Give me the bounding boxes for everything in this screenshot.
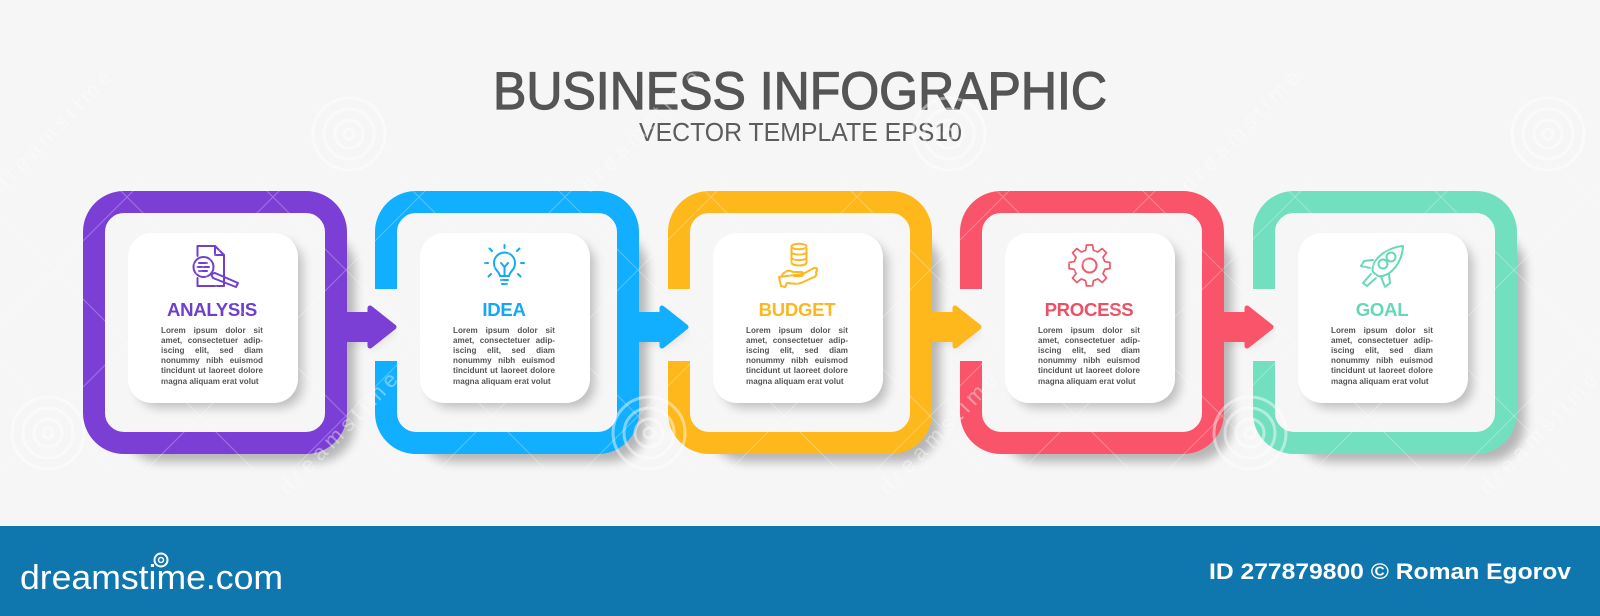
body text: process	[1038, 326, 1140, 386]
ring: goal	[1253, 191, 1530, 468]
watermark overlay: dreamstime	[576, 65, 705, 197]
body text: analysis: nonummy nibh euismod	[161, 356, 263, 365]
watermark overlay: dreamstime	[274, 367, 403, 499]
body text: budget	[746, 326, 848, 386]
panel: budget	[668, 191, 982, 468]
panel: goal	[1253, 191, 1530, 468]
body text: idea	[453, 326, 555, 386]
body text: goal: nonummy nibh euismod	[1331, 356, 1433, 365]
ring and arrow: idea	[375, 191, 688, 468]
body text: process: nonummy nibh euismod	[1038, 356, 1140, 365]
card: budget	[713, 233, 883, 403]
body text: idea: nonummy nibh euismod	[453, 356, 555, 365]
body text: goal	[1331, 326, 1433, 386]
body text: analysis: iscing elit, sed diam	[161, 346, 263, 355]
panel: analysis	[83, 191, 396, 468]
card: process	[1005, 233, 1175, 403]
body text: idea: tincidunt ut laoreet dolore	[453, 366, 555, 375]
title block	[493, 62, 1107, 147]
icon: coins and hand	[778, 242, 818, 288]
subheading: VECTOR TEMPLATE EPS10	[639, 117, 962, 147]
watermark overlay: dreamstime	[1176, 65, 1305, 197]
body text: goal: Lorem ipsum dolor sit	[1331, 326, 1433, 334]
icon: gear	[1068, 244, 1111, 287]
label: goal: GOAL	[1356, 298, 1408, 320]
body text: idea: iscing elit, sed diam	[453, 346, 555, 355]
body text: budget: magna aliquam erat volut	[746, 377, 844, 386]
body text: process: tincidunt ut laoreet dolore	[1038, 366, 1140, 375]
body text: budget: iscing elit, sed diam	[746, 346, 848, 355]
body text: analysis	[161, 326, 263, 386]
body text: process: iscing elit, sed diam	[1038, 346, 1140, 355]
card: goal	[1298, 233, 1468, 403]
body text: budget: tincidunt ut laoreet dolore	[746, 366, 848, 375]
body text: analysis: magna aliquam erat volut	[161, 377, 259, 386]
label: analysis: ANALYSIS	[167, 298, 257, 320]
body text: process: Lorem ipsum dolor sit	[1038, 326, 1140, 334]
watermark overlay: dreamstime	[874, 367, 1003, 499]
panel: process	[960, 191, 1274, 468]
body text: idea: magna aliquam erat volut	[453, 377, 551, 386]
icon: document with magnifier	[192, 245, 239, 288]
panel: idea	[375, 191, 688, 468]
label: budget: BUDGET	[759, 298, 835, 320]
body text: budget: Lorem ipsum dolor sit	[746, 326, 848, 334]
card: analysis	[128, 233, 298, 403]
label: process: PROCESS	[1045, 298, 1133, 320]
watermark overlay: dreamstime	[1474, 367, 1600, 499]
body text: idea: Lorem ipsum dolor sit	[453, 326, 555, 334]
ring and arrow: process	[960, 191, 1274, 468]
ring and arrow: analysis	[83, 191, 396, 468]
body text: analysis: Lorem ipsum dolor sit	[161, 326, 263, 334]
card: idea	[420, 233, 590, 403]
footer logo: dreamstime.com	[20, 559, 283, 597]
label: idea: IDEA	[482, 298, 526, 320]
body text: budget: nonummy nibh euismod	[746, 356, 848, 365]
body text: idea: amet, consectetuer adip-	[453, 336, 555, 345]
body text: budget: amet, consectetuer adip-	[746, 336, 848, 345]
body text: goal: tincidunt ut laoreet dolore	[1331, 366, 1433, 375]
body text: process: amet, consectetuer adip-	[1038, 336, 1140, 345]
icon: light bulb	[484, 244, 525, 285]
body text: goal: iscing elit, sed diam	[1331, 346, 1433, 355]
body text: goal: amet, consectetuer adip-	[1331, 336, 1433, 345]
body text: process: magna aliquam erat volut	[1038, 377, 1136, 386]
footer credit: ID 277879800 © Roman Egorov	[1209, 559, 1572, 584]
body text: analysis: tincidunt ut laoreet dolore	[161, 366, 263, 375]
footer banner	[0, 526, 1600, 616]
body text: analysis: amet, consectetuer adip-	[161, 336, 263, 345]
icon: rocket	[1360, 245, 1404, 288]
body text: goal: magna aliquam erat volut	[1331, 377, 1429, 386]
ring and arrow: budget	[668, 191, 982, 468]
